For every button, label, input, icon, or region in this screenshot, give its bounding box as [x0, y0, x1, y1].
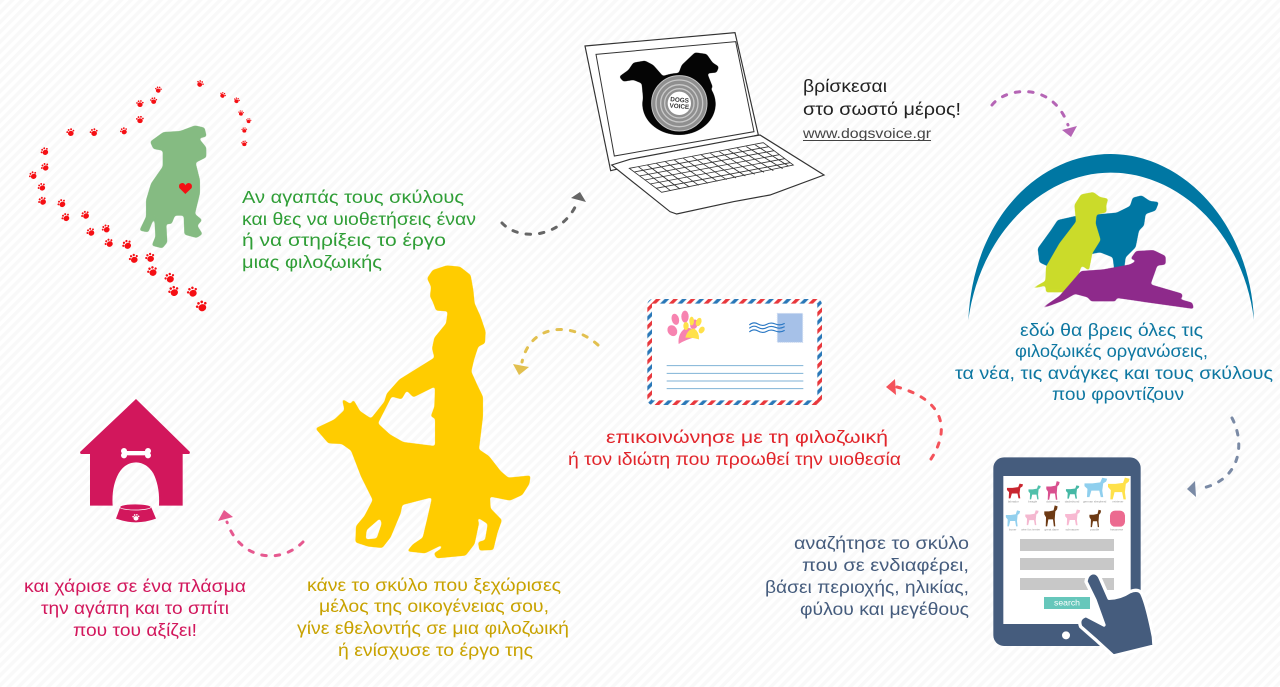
- search button: [1044, 597, 1090, 609]
- postmark waves: [749, 323, 785, 332]
- text: make the dog a family member: μέλος της οικογένειας σου,: [319, 596, 549, 616]
- arrow: pink to doghouse: [218, 510, 303, 556]
- breed labels: doberman: [1046, 500, 1060, 504]
- home button: [1062, 631, 1070, 639]
- breed labels: beagle: [1028, 500, 1037, 504]
- text: contact: [568, 427, 901, 469]
- arrow: purple to organisations logo: [992, 92, 1077, 137]
- bowl paw: [132, 514, 139, 521]
- search button: search: [1054, 598, 1080, 608]
- text: if you love dogs: μιας φιλοζωικής: [242, 252, 382, 272]
- envelope body: [650, 301, 820, 403]
- hand pointer: [1080, 573, 1154, 656]
- icon: airmail envelope: [650, 301, 820, 403]
- text: search for the dog: αναζήτησε το σκύλο: [794, 533, 969, 553]
- laptop base: [612, 135, 824, 214]
- icon: green dog with paw-print heart: [28, 79, 252, 313]
- text: give love and home: την αγάπη και το σπίτι: [41, 598, 229, 618]
- text: if you love dogs: ή να στηρίξεις το έργο: [242, 230, 446, 250]
- logo: black dogs: [619, 52, 719, 135]
- purple dog: [1039, 250, 1194, 310]
- text: find all organisations: τα νέα, τις ανάγκες και τους σκύλους: [955, 363, 1273, 383]
- text: if you love dogs: [242, 187, 476, 272]
- dog breeds grid: [1006, 478, 1130, 527]
- pink paw: [665, 311, 699, 344]
- text: give love and home: που του αξίζει!: [73, 620, 197, 640]
- text: find all organisations: [955, 320, 1273, 404]
- address lines: [667, 366, 803, 389]
- blue arc: [968, 154, 1254, 320]
- text: find all organisations: εδώ θα βρεις όλες τις: [1020, 320, 1203, 340]
- text: find all organisations: φιλοζωικές οργανώσεις,: [1015, 341, 1208, 361]
- blue dog: [1038, 195, 1159, 271]
- text: search for the dog: βάσει περιοχής, ηλικίας,: [765, 577, 969, 597]
- text: search for the dog: [765, 533, 969, 619]
- text: you are in the right place: βρίσκεσαι: [803, 76, 887, 96]
- text: make the dog a family member: γίνε εθελοντής σε μια φιλοζωική: [297, 618, 569, 638]
- icon: doghouse: [80, 399, 190, 522]
- breed labels: havanese: [1110, 527, 1123, 531]
- breed labels: german shepherd: [1083, 500, 1107, 504]
- paw-print trail: [28, 79, 252, 313]
- text: you are in the right place: στο σωστό μέρος!: [803, 99, 961, 119]
- icon: laptop with logo: VOICE: [669, 102, 689, 111]
- search fields: [1020, 539, 1114, 590]
- text: if you love dogs: και θες να υιοθετήσεις έναν: [242, 209, 476, 229]
- icon: woman walking dog: [315, 265, 531, 558]
- text: give love and home: [24, 576, 246, 640]
- breed labels: poodle: [1090, 527, 1099, 531]
- breed labels: schnauzer: [1065, 527, 1079, 531]
- icon: red heart: [179, 183, 192, 194]
- text: make the dog a family member: [297, 575, 569, 660]
- text: give love and home: και χάρισε σε ένα πλάσμα: [24, 576, 246, 596]
- yellow paw: [683, 317, 706, 339]
- text: you are in the right place: [802, 76, 961, 141]
- tablet body: [993, 457, 1141, 646]
- arrow: steel to tablet: [1187, 418, 1239, 497]
- bowl: [116, 504, 156, 522]
- green dog silhouette: [139, 125, 207, 248]
- stamp: [777, 313, 803, 342]
- text: make the dog a family member: κάνε το σκύλο που ξεχώρισες: [307, 575, 561, 595]
- text: search for the dog: που σε ενδιαφέρει,: [802, 555, 969, 575]
- laptop lid: [585, 33, 758, 171]
- text: search for the dog: φύλου και μεγέθους: [800, 599, 969, 619]
- logo: grey record: [652, 76, 707, 131]
- breed labels: labrador: [1008, 500, 1019, 504]
- text: contact: επικοινώνησε με τη φιλοζωική: [606, 427, 888, 447]
- icon: laptop with logo: [585, 33, 824, 214]
- arrow: grey to laptop: [502, 192, 586, 234]
- icon: tablet search: [993, 457, 1154, 656]
- text: find all organisations: που φροντίζουν: [1052, 384, 1184, 404]
- text: contact: ή τον ιδιώτη που προωθεί την υιοθεσία: [568, 449, 901, 469]
- breed labels: great dane: [1045, 527, 1059, 531]
- keyboard: [629, 143, 793, 192]
- breed labels: [1008, 500, 1123, 531]
- text: if you love dogs: Αν αγαπάς τους σκύλους: [242, 187, 464, 207]
- logo text: DOGS: [670, 96, 689, 105]
- arrow: gold to woman: [513, 330, 598, 375]
- tablet screen: [1003, 476, 1131, 624]
- text: make the dog a family member: ή ενίσχυσε το έργο της: [338, 640, 533, 660]
- bone: [121, 448, 151, 458]
- breed labels: boxer: [1009, 527, 1016, 531]
- breed labels: retriever: [1113, 500, 1123, 504]
- lime dog: [1029, 192, 1108, 292]
- breed labels: wire fox terrier: [1021, 527, 1040, 531]
- icon: three dogs under arc: [968, 154, 1254, 320]
- house: [80, 399, 190, 506]
- arrow: red to envelope: [886, 379, 941, 459]
- laptop screen: [596, 42, 754, 156]
- text: you are in the right place: www.dogsvoice.gr: [802, 125, 931, 141]
- breed labels: dachshund: [1065, 500, 1080, 504]
